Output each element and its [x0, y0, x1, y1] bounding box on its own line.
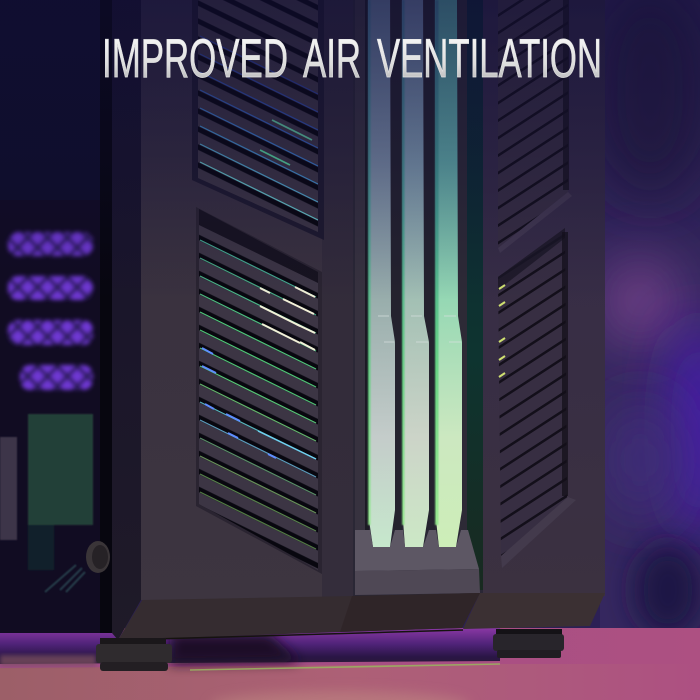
top dark vignette [0, 0, 700, 300]
thumbscrew [86, 541, 110, 573]
title: AIR [303, 27, 361, 89]
right upper vent grille [498, 0, 572, 253]
left glass panel with interior [0, 0, 113, 633]
case left column [112, 0, 355, 640]
lit slat lines, upper grille [200, 36, 318, 220]
centre channel [353, 0, 483, 596]
interior green panel [28, 414, 93, 570]
lit slat lines, lower grille [200, 240, 316, 549]
RGB light bars [368, 0, 462, 547]
title [102, 27, 602, 89]
coloured bar edges [368, 0, 438, 525]
right lower vent grille [498, 228, 576, 568]
case right column [483, 0, 605, 596]
case base panels [118, 593, 605, 640]
small ticks on the bars [378, 316, 461, 342]
interior cables [45, 565, 85, 592]
left upper vent grille [192, 0, 324, 240]
left foot [96, 638, 172, 671]
interior white label [0, 437, 17, 540]
right foot [493, 629, 564, 658]
reflected purple strip and shadow under the case [0, 628, 500, 670]
lit slat dashes [499, 285, 505, 377]
bottom block of centre channel [355, 530, 480, 595]
left lower vent grille [196, 207, 322, 574]
floor: front surface [0, 664, 700, 700]
title: IMPROVED [102, 27, 288, 89]
background: blurred purple room [125, 0, 700, 628]
interior: perforated purple vents [8, 232, 93, 390]
floor: back surface [0, 628, 700, 668]
bright highlights [260, 287, 315, 350]
